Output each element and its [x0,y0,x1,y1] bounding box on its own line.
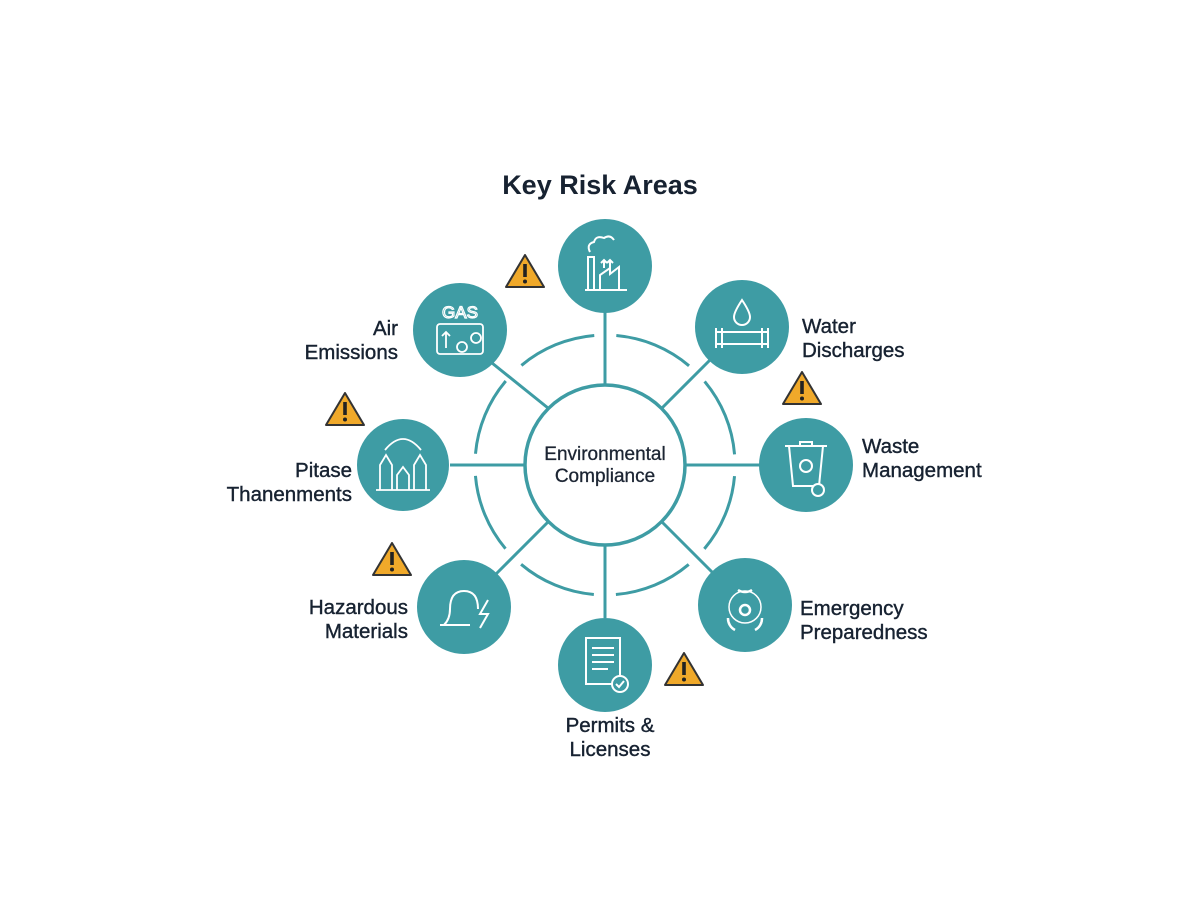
node: pitase [357,419,449,511]
label: permits & licenses: Permits & [566,714,654,737]
center circle [525,385,685,545]
label: pitase thanenments: Thanenments [227,483,352,506]
label: air emissions: Emissions [305,341,398,364]
label: water discharges [802,315,905,362]
node: waste [759,418,853,512]
label: water discharges: Discharges [802,339,905,362]
label: hazardous materials: Hazardous [309,596,408,619]
outer ring arcs [475,335,735,595]
node: emergency [698,558,792,652]
warning icons [326,255,821,685]
node: hazardous [417,560,511,654]
node: permits [558,618,652,712]
node: air emissions GAS [413,283,507,377]
label: air emissions: Air [373,317,398,340]
label: permits & licenses [566,714,654,761]
label: emergency preparedness [800,597,928,644]
label: permits & licenses: Licenses [570,738,650,761]
label: waste management: Waste [862,435,919,458]
spokes [450,312,760,618]
title: Key Risk Areas [502,170,698,200]
label: pitase thanenments: Pitase [295,459,352,482]
node: air emissions GAS: GAS [442,303,478,322]
label: emergency preparedness: Emergency [800,597,904,620]
label: hazardous materials: Materials [325,620,408,643]
label: air emissions [305,317,398,364]
node: water [695,280,789,374]
center circle: Environmental [544,444,666,465]
label: pitase thanenments [226,459,352,506]
label: emergency preparedness: Preparedness [800,621,928,644]
center circle: Compliance [555,466,655,487]
node: factory [558,219,652,313]
label: hazardous materials [309,596,408,643]
label: waste management [862,435,982,482]
label: water discharges: Water [802,315,856,338]
label: waste management: Management [862,459,982,482]
